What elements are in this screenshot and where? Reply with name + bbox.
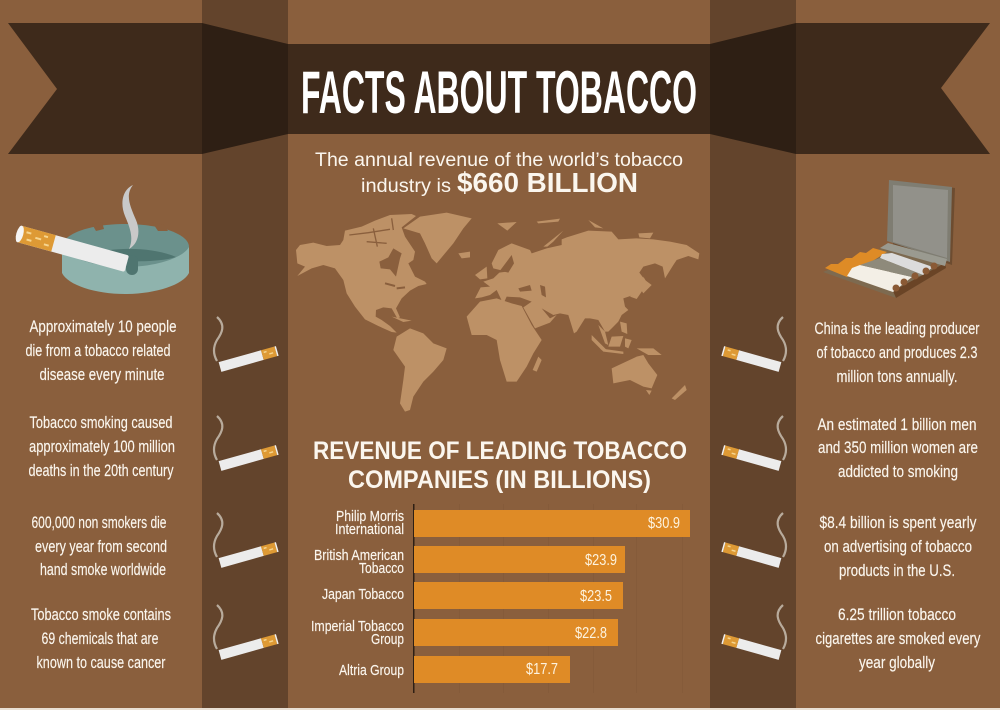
Great Lakes [385, 283, 405, 288]
bar chart [311, 504, 690, 693]
bar: British American Tobacco: Tobacco [359, 561, 404, 577]
left fact 2: deaths in the 20th century [28, 461, 174, 480]
chart heading: COMPANIES (IN BILLIONS) [348, 466, 651, 494]
left dark vertical stripe [202, 0, 288, 710]
Iceland [458, 252, 470, 258]
left fact 1: Approximately 10 people [30, 317, 176, 336]
Cuba [392, 317, 412, 322]
bar: Philip Morris International [335, 509, 690, 538]
icon: open cigarette pack [823, 180, 955, 298]
icon: small cigarette left 4 [214, 605, 279, 660]
South America [393, 328, 447, 412]
right fact 4: 6.25 trillion tobacco [838, 605, 956, 624]
icon: small cigarette left 2 [214, 416, 279, 471]
left fact 3: 600,000 non smokers die [32, 513, 166, 532]
Africa [467, 298, 542, 382]
bar: Philip Morris International: Philip Morris [336, 509, 404, 525]
world map [296, 213, 699, 412]
right fact 3 [820, 513, 977, 580]
bar: Imperial Tobacco Group: $22.8 [575, 625, 607, 642]
left fact 2 [28, 413, 175, 480]
right fact 2: addicted to smoking [838, 462, 958, 481]
bar: Philip Morris International: $30.9 [648, 515, 680, 532]
intro text: The annual revenue of the world’s tobacco [315, 150, 683, 171]
New Zealand [672, 385, 687, 400]
right fact 1: million tons annually. [836, 367, 958, 386]
Madagascar [533, 357, 542, 372]
left fact 2: approximately 100 million [29, 437, 175, 456]
left fact 3: every year from second [35, 537, 167, 556]
bar: Altria Group [339, 656, 570, 683]
bar: British American Tobacco [314, 546, 625, 577]
left fact 4: known to cause cancer [36, 653, 166, 672]
bar: Imperial Tobacco Group: Imperial Tobacco [311, 619, 404, 635]
Tasmania [646, 390, 652, 395]
Black and Caspian seas [518, 285, 546, 297]
left fact 1 [26, 317, 176, 384]
bar: Altria Group: Altria Group [339, 663, 404, 679]
left fact 3 [32, 513, 167, 579]
North America [296, 214, 427, 333]
left fact 1: disease every minute [40, 365, 164, 384]
right dark vertical stripe [710, 0, 796, 710]
icon: small cigarette right 2 [721, 416, 786, 471]
right fact 3: products in the U.S. [839, 561, 955, 580]
bar: Altria Group: $17.7 [526, 661, 558, 678]
Malay peninsula [598, 325, 608, 345]
bar: Philip Morris International: International [335, 522, 404, 538]
bar: Imperial Tobacco Group: Group [371, 632, 404, 648]
left fact 4 [31, 605, 171, 672]
icon: small cigarette left 1 [214, 317, 279, 372]
Baltic Sea [500, 255, 514, 273]
axis line [413, 504, 414, 693]
Eurasia [475, 231, 699, 333]
Greenland [403, 213, 472, 263]
left fact 4: Tobacco smoke contains [31, 605, 171, 624]
Arctic channels [349, 218, 393, 247]
right fact 1 [814, 319, 980, 386]
Australia [612, 355, 657, 388]
Islands [630, 277, 647, 299]
left fact 1: die from a tobacco related [26, 341, 170, 360]
icon: small cigarette right 1 [721, 317, 786, 372]
chart heading [313, 437, 687, 494]
icon: small cigarette right 4 [721, 605, 786, 660]
bar: Japan Tobacco: Japan Tobacco [322, 587, 404, 603]
bar: Imperial Tobacco Group [311, 619, 618, 648]
intro text: industry is [361, 176, 451, 197]
left fact 4: 69 chemicals that are [42, 629, 158, 648]
Hudson Bay [379, 248, 402, 277]
icon: small cigarette right 3 [721, 513, 786, 568]
chart heading: REVENUE OF LEADING TOBACCO [313, 437, 687, 465]
bar: British American Tobacco: $23.9 [585, 552, 617, 569]
right fact 2 [818, 415, 978, 481]
icon: small cigarette left 3 [214, 513, 279, 568]
intro text: $660 BILLION [457, 167, 638, 198]
bar: Japan Tobacco [322, 582, 623, 609]
bottom edge strip [0, 708, 1000, 710]
bar: British American Tobacco: British American [314, 548, 404, 564]
icon: ashtray with cigarette [14, 185, 189, 294]
right fact 4 [816, 605, 981, 672]
left fact 3: hand smoke worldwide [40, 560, 166, 579]
left fact 2: Tobacco smoking caused [30, 413, 172, 432]
right fact 4: year globally [859, 653, 935, 672]
intro text [315, 150, 683, 198]
title ribbon banner [8, 23, 990, 154]
bar: Japan Tobacco: $23.5 [580, 588, 612, 605]
